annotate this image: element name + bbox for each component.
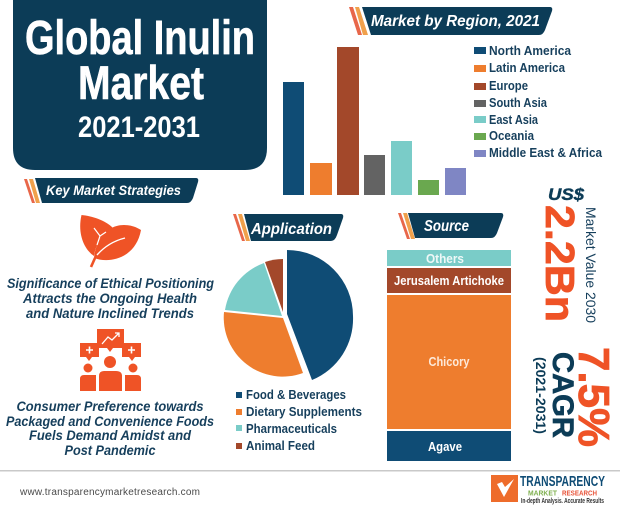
stacked bar: source: Jerusalem Artichoke xyxy=(394,274,504,288)
stacked bar: source: Others xyxy=(426,252,464,266)
text: consumer preference: Post Pandemic xyxy=(64,443,156,458)
heading: market by region: Market by Region, 2021 xyxy=(371,13,540,30)
heading: source xyxy=(398,213,503,239)
text: ethical positioning: and Nature Inclined Trends xyxy=(26,306,194,321)
legend: regions: East Asia xyxy=(489,113,539,127)
footer rule xyxy=(0,470,620,472)
text: consumer preference: Consumer Preference towards xyxy=(16,399,204,414)
heading: market by region xyxy=(349,7,552,35)
stat: market value 2030: Market Value 2030 xyxy=(583,207,599,323)
text: ethical positioning xyxy=(7,276,215,321)
stat: CAGR: CAGR xyxy=(546,352,579,438)
title panel: 2021-2031 xyxy=(78,111,200,144)
text: consumer preference: Fuels Demand Amidst and xyxy=(29,428,192,443)
legend: regions: Latin America xyxy=(489,61,566,75)
stat: CAGR: 7.5% xyxy=(569,347,618,447)
stat: market value 2030 xyxy=(537,185,599,323)
text: ethical positioning: Significance of Ethical Positioning xyxy=(7,276,215,291)
stat: market value 2030: 2.2Bn xyxy=(537,205,583,322)
legend: application: Dietary Supplements xyxy=(246,405,362,419)
text: consumer preference: Packaged and Convenience Foods xyxy=(6,414,214,429)
logo: transparency market research xyxy=(491,473,605,505)
pie chart: application xyxy=(224,250,353,380)
legend: regions: Oceania xyxy=(489,129,535,143)
legend: application: Food & Beverages xyxy=(246,388,346,402)
heading: key market strategies xyxy=(24,178,198,203)
text: consumer preference xyxy=(6,399,214,458)
title panel xyxy=(13,0,267,170)
logo: transparency market research: RESEARCH xyxy=(562,488,597,498)
legend: regions: North America xyxy=(489,44,572,58)
legend: regions: Europe xyxy=(489,79,528,93)
heading: application: Application xyxy=(250,221,332,238)
legend: application: Animal Feed xyxy=(246,439,315,453)
heading: key market strategies: Key Market Strategies xyxy=(46,183,181,198)
title panel: Global Inulin xyxy=(25,12,255,65)
legend: application: Pharmaceuticals xyxy=(246,422,337,436)
bar chart: market by region xyxy=(283,47,466,195)
stat: CAGR xyxy=(533,347,618,447)
heading: application xyxy=(233,214,343,241)
stacked bar: source: Agave xyxy=(428,440,462,454)
icon: consumers with charts xyxy=(80,329,141,391)
stacked bar: source: Chicory xyxy=(428,355,470,369)
stat: CAGR: (2021-2031) xyxy=(533,357,548,434)
legend: regions xyxy=(474,44,603,160)
stat: market value 2030: US$ xyxy=(548,185,585,204)
title panel: Market xyxy=(78,56,204,109)
text: ethical positioning: Attracts the Ongoing Health xyxy=(22,291,197,306)
legend: regions: South Asia xyxy=(489,96,548,110)
stacked bar: source xyxy=(387,250,511,461)
heading: source: Source xyxy=(424,218,469,235)
icon: leaf xyxy=(80,215,141,267)
legend: application xyxy=(236,388,362,453)
footer url: www.transparencymarketresearch.com xyxy=(19,487,200,498)
legend: regions: Middle East & Africa xyxy=(489,146,603,160)
logo: transparency market research: MARKET xyxy=(528,488,557,498)
